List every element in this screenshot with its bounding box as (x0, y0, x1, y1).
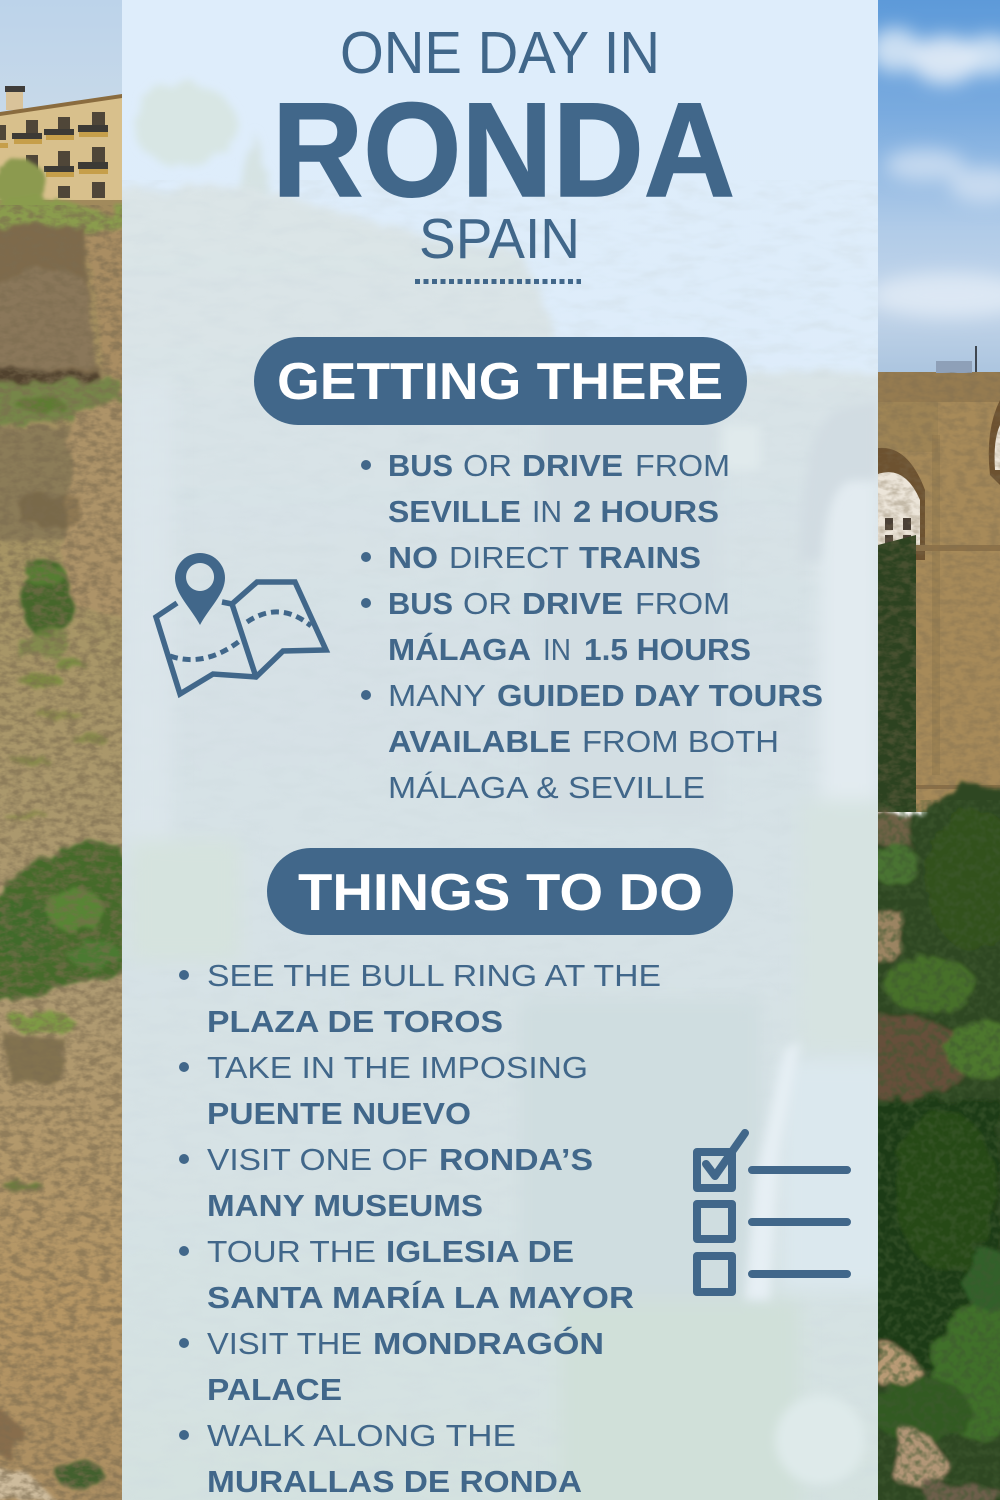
item: bus or drive from Seville: IN (532, 494, 562, 529)
subtitle: Spain: SPAIN (419, 207, 580, 271)
item: no direct trains: NO (388, 540, 438, 575)
item: museums: RONDA’S (439, 1142, 593, 1177)
item: guided day tours: AVAILABLE (388, 724, 571, 759)
item: bus or drive from Malaga: 1.5 HOURS (584, 632, 751, 667)
item: bus or drive from Malaga: DRIVE (522, 586, 623, 621)
item: Mondragon palace (179, 1325, 604, 1407)
item: bus or drive from Seville: SEVILLE (388, 494, 521, 529)
trees and rocks (870, 780, 1000, 1500)
item: guided day tours: FROM BOTH (582, 724, 779, 759)
item: bus or drive from Seville: DRIVE (522, 448, 623, 483)
title line: One Day In: ONE DAY IN (340, 20, 660, 86)
item: bus or drive from Malaga: OR (463, 586, 512, 621)
item: bus or drive from Malaga: IN (543, 632, 571, 667)
photo strip: right sky, Puente Nuevo bridge and greenery (869, 0, 1000, 1500)
item: bull ring: PLAZA DE TOROS (207, 1004, 503, 1039)
item: bull ring: SEE THE BULL RING AT THE (207, 958, 661, 993)
item: bus or drive from Seville: BUS (388, 448, 453, 483)
item: museums: MANY MUSEUMS (207, 1188, 483, 1223)
item: bull ring (179, 958, 661, 1039)
clouds (869, 28, 1000, 317)
item: Murallas (179, 1418, 582, 1499)
cliff rock faces (0, 156, 122, 554)
list: things to do (179, 958, 661, 1499)
item: Puente Nuevo: TAKE IN THE IMPOSING (207, 1050, 588, 1085)
photo strip: left cliff with hotel (0, 0, 130, 1500)
heading pill: Things To Do: THINGS TO DO (298, 864, 703, 922)
item: Murallas: MURALLAS DE RONDA (207, 1464, 582, 1499)
item: Puente Nuevo: PUENTE NUEVO (207, 1096, 471, 1131)
bridge (878, 346, 1000, 812)
item: guided day tours: GUIDED DAY TOURS (497, 678, 823, 713)
item: Iglesia: TOUR THE (207, 1234, 376, 1269)
item: Puente Nuevo (179, 1050, 588, 1131)
item: guided day tours: MÁLAGA & SEVILLE (388, 770, 705, 805)
panel: translucent centre column over faded cliff (110, 0, 890, 1500)
item: Iglesia: IGLESIA DE (386, 1234, 574, 1269)
item: Mondragon palace: PALACE (207, 1372, 342, 1407)
item: Murallas: WALK ALONG THE (207, 1418, 516, 1453)
item: bus or drive from Malaga (361, 586, 751, 667)
list: getting there (361, 448, 823, 805)
item: bus or drive from Seville: OR (463, 448, 512, 483)
item: bus or drive from Malaga: FROM (635, 586, 730, 621)
icon: checklist (697, 1133, 847, 1292)
item: bus or drive from Malaga: MÁLAGA (388, 632, 531, 667)
title: Ronda: RONDA (272, 76, 735, 225)
item: Iglesia (179, 1234, 634, 1315)
item: bus or drive from Seville (361, 448, 730, 529)
item: bus or drive from Malaga: BUS (388, 586, 453, 621)
item: no direct trains (361, 540, 701, 575)
heading pill: Getting There: GETTING THERE (277, 353, 723, 411)
heading pill: Things To Do (267, 848, 733, 935)
item: Iglesia: SANTA MARÍA LA MAYOR (207, 1280, 634, 1315)
item: guided day tours (361, 678, 823, 805)
item: Mondragon palace: MONDRAGÓN (373, 1325, 604, 1361)
item: no direct trains: TRAINS (579, 540, 701, 575)
item: Mondragon palace: VISIT THE (207, 1326, 362, 1361)
hotel building (0, 86, 122, 200)
item: bus or drive from Seville: 2 HOURS (573, 494, 719, 529)
icon: map with location pin (156, 553, 326, 694)
heading pill: Getting There (254, 337, 747, 425)
item: museums (179, 1142, 593, 1223)
green bushes (0, 558, 125, 1500)
item: museums: VISIT ONE OF (207, 1142, 428, 1177)
item: guided day tours: MANY (388, 678, 486, 713)
item: no direct trains: DIRECT (449, 540, 569, 575)
item: bus or drive from Seville: FROM (635, 448, 730, 483)
